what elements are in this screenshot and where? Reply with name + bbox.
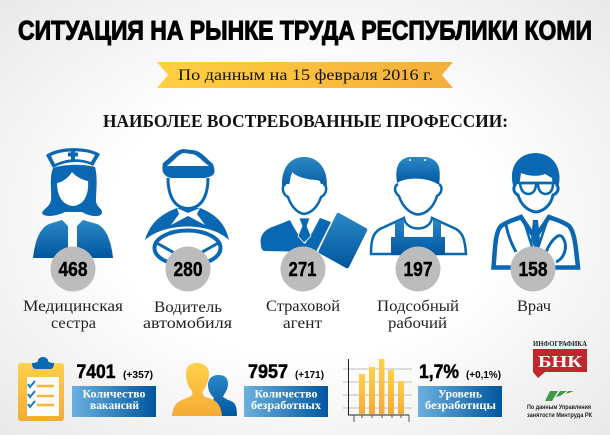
count: agents [280, 246, 326, 292]
label: nurse [23, 298, 124, 332]
label: agent: Страховой [266, 298, 340, 315]
stat: vacancies [72, 362, 156, 417]
label: laborer [377, 298, 459, 332]
source note: занятости Минтруда РК [527, 412, 592, 419]
source note: По данным Управления [527, 404, 591, 411]
label: nurse: Медицинская [23, 298, 124, 315]
icon: laborer [371, 157, 466, 255]
count: nurses: 468 [58, 259, 88, 281]
label: driver: Водитель [154, 299, 222, 316]
stat: unemployment rate: безработицы [425, 400, 496, 412]
logo: BNK [533, 340, 587, 378]
label: doctor: Врач [517, 298, 551, 315]
count: doctors: 158 [518, 259, 548, 281]
label: laborer: Подсобный [377, 298, 459, 315]
count: agents: 271 [288, 259, 316, 281]
icon: driver [145, 149, 229, 266]
stat: vacancies: (+357) [123, 370, 153, 381]
stat: unemployment rate: (+0,1%) [466, 370, 501, 381]
stat: unemployment rate: Уровень [438, 388, 482, 400]
logo: green emblem [545, 391, 574, 401]
logo: BNK: ИНФОГРАФИКА [533, 340, 587, 348]
count: nurses [50, 246, 96, 292]
count: laborers [396, 246, 440, 292]
label: agent [266, 298, 340, 332]
stat: unemployed: Количество [254, 388, 318, 400]
count: laborers: 197 [404, 259, 432, 281]
label: agent: агент [283, 315, 322, 332]
count: drivers [166, 246, 210, 292]
section heading: НАИБОЛЕЕ ВОСТРЕБОВАННЫЕ ПРОФЕССИИ: [103, 111, 508, 131]
count: drivers: 280 [174, 259, 202, 281]
icon: nurse [33, 148, 113, 258]
stat: unemployment rate [418, 361, 502, 417]
source note [527, 404, 592, 419]
bar chart icon [343, 359, 412, 422]
count: doctors [510, 246, 556, 292]
icon: doctor [494, 153, 578, 268]
icon: clipboard [18, 357, 64, 421]
label: driver: автомобиля [143, 315, 233, 332]
stat: unemployed [244, 362, 328, 417]
label: driver [143, 299, 233, 332]
stat: unemployed: 7957 [248, 362, 288, 383]
stat: vacancies: 7401 [76, 362, 116, 383]
stat: unemployment rate: 1,7% [419, 361, 459, 383]
date ribbon: По данным на 15 февраля 2016 г. [178, 67, 433, 84]
icon: insurance agent [261, 157, 367, 268]
label: nurse: сестра [51, 315, 96, 332]
logo: BNK: БНК [538, 352, 583, 371]
date ribbon [157, 62, 453, 88]
icon: people [172, 363, 237, 416]
stat: vacancies: вакансий [90, 400, 139, 412]
stat: vacancies: Количество [82, 388, 146, 400]
stat: unemployed: безработных [251, 400, 321, 412]
label: laborer: рабочий [388, 315, 447, 332]
stat: unemployed: (+171) [295, 370, 324, 381]
